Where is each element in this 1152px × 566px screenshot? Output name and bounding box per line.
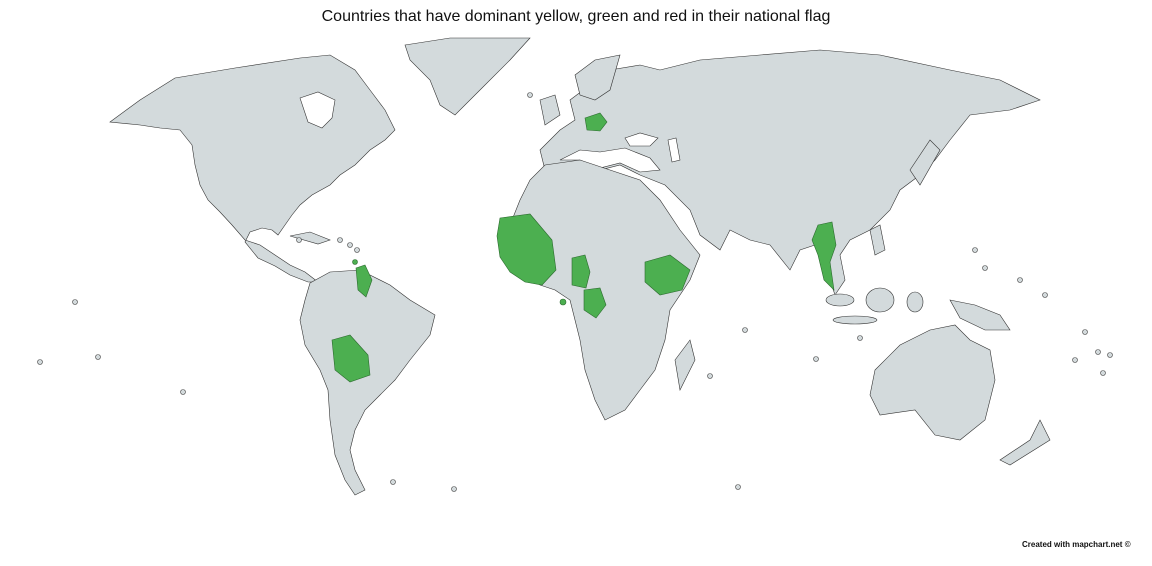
landmass: Australia [870, 325, 1050, 465]
country: Congo [584, 288, 606, 318]
landmass: Africa [510, 160, 700, 420]
country: Sao Tome [560, 299, 566, 305]
country: Cameroon [572, 255, 590, 288]
highlighted countries [332, 113, 836, 382]
country: Bolivia [332, 335, 370, 382]
small islands [38, 92, 1112, 492]
credit: Created with mapchart.net © [1022, 540, 1131, 549]
country: Ethiopia [645, 255, 690, 295]
landmass: Southeast Asia islands [826, 288, 1010, 330]
country: Belarus [585, 113, 607, 131]
title: Countries that have dominant yellow, green and red in their national flag [322, 8, 830, 25]
country: Guyana [356, 265, 372, 297]
country: Myanmar [812, 222, 836, 290]
landmass: Eurasia [540, 50, 1040, 295]
landmass: North America [110, 38, 530, 282]
landmass: South America [300, 270, 435, 495]
country: Grenada [352, 260, 358, 264]
country: West Africa group [497, 214, 556, 285]
